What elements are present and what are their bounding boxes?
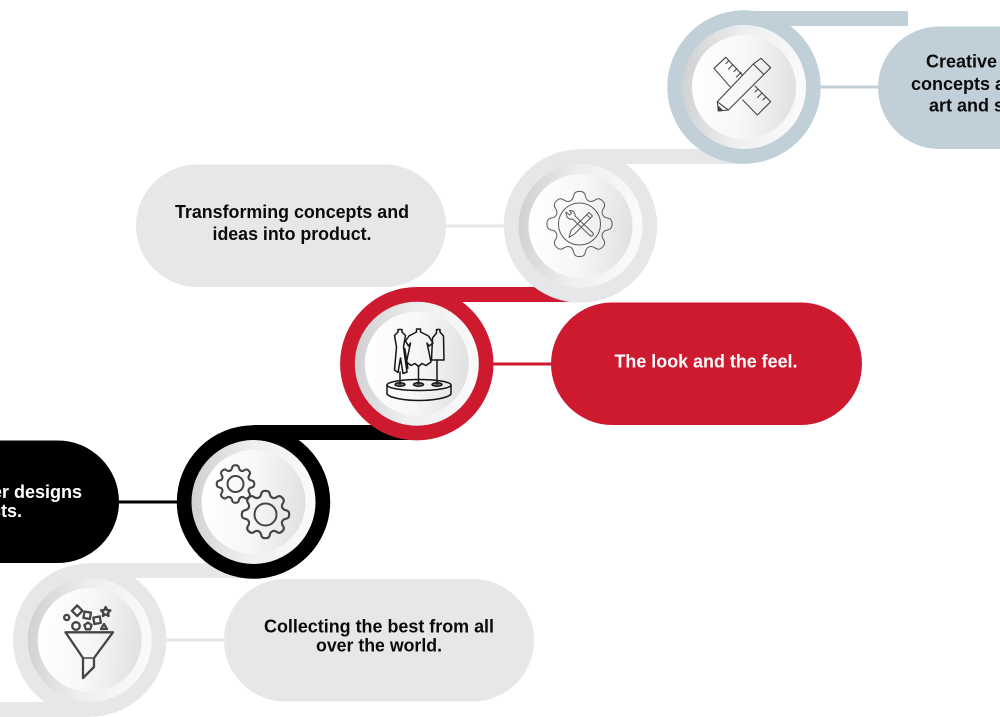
text: transforming: Transforming concepts and [175, 202, 409, 222]
icon: funnel [64, 605, 113, 678]
disc: step 2 [518, 164, 642, 288]
step 4: designs [0, 425, 417, 571]
step 2: transforming [136, 149, 745, 295]
pill: transforming [136, 164, 446, 287]
step 3: look and feel [348, 287, 862, 433]
disc: step 3 [355, 302, 479, 426]
disc: step 4 [192, 440, 316, 564]
step 1: creative [675, 11, 1000, 156]
icon: two gears [217, 465, 289, 538]
bar: step 4 top [253, 425, 417, 440]
pill: designs [0, 440, 119, 563]
bar: step 2 top [580, 149, 745, 164]
icon: dresses on platform [387, 329, 451, 400]
ring: step 1 [675, 18, 813, 156]
text: collecting [264, 616, 494, 656]
connector: step 2 [440, 224, 510, 228]
pill: collecting [224, 579, 534, 702]
text: transforming [175, 202, 409, 244]
text: collecting: Collecting the best from all [264, 616, 494, 636]
text: transforming: ideas into product. [212, 224, 372, 244]
disc: step 1 [682, 25, 806, 149]
ring: step 2 [511, 157, 650, 295]
pill: look and feel [551, 302, 862, 425]
bar: step 3 top [417, 287, 581, 302]
bar: step 1 top [744, 11, 908, 26]
ring: step 4 [184, 433, 323, 571]
icon: gear with wrench and pencil [547, 191, 612, 257]
text: collecting: over the world. [316, 636, 442, 656]
icon: ruler and pencil [714, 57, 771, 115]
connector: step 1 [815, 86, 885, 88]
bar: step 5 top [90, 563, 254, 578]
text: designs [0, 482, 82, 521]
bar: step 5 bottom left [0, 702, 90, 717]
step 5: collecting [0, 563, 534, 717]
connector: step 5 [160, 638, 230, 642]
disc: step 5 [28, 578, 152, 702]
text: creative [911, 52, 1000, 116]
ring: step 5 [20, 571, 159, 709]
pill: creative [878, 26, 1000, 149]
text: look and feel: The look and the feel. [614, 352, 798, 372]
connector: step 3 [488, 362, 558, 366]
connector: step 4 [112, 500, 182, 504]
ring: step 3 [348, 294, 486, 433]
